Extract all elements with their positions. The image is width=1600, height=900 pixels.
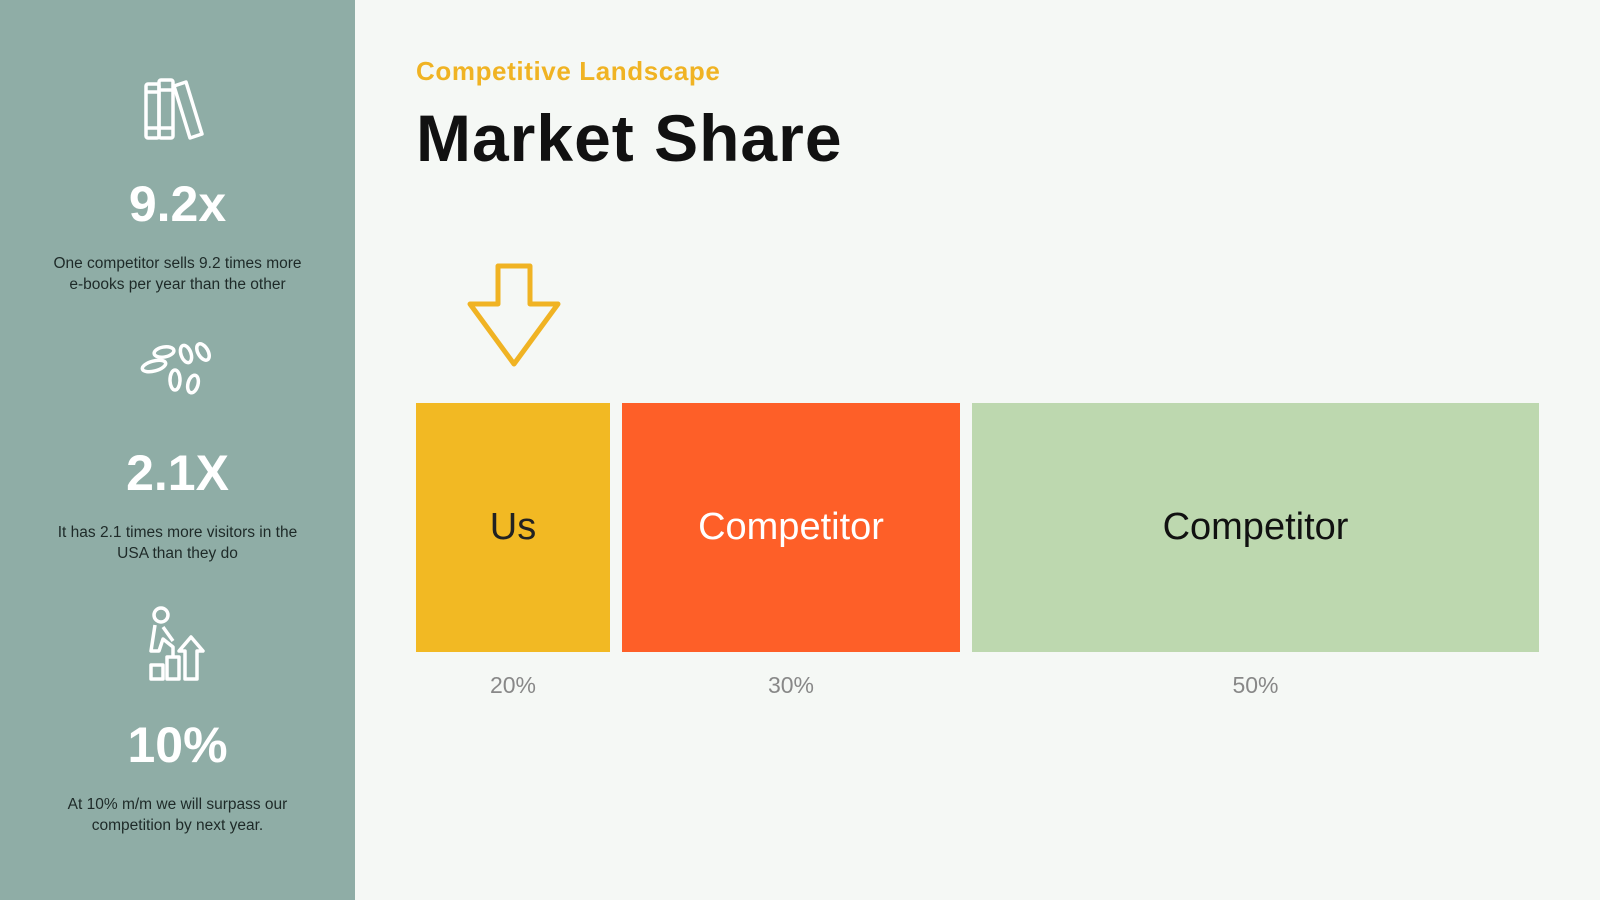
bar: competitor 2 — [972, 403, 1539, 652]
label 50%: 50% — [1232, 672, 1279, 698]
subtitle: Competitive Landscape — [416, 56, 720, 86]
text 2: It has 2.1 times more visitors in the — [58, 524, 297, 541]
bar: competitor 1: Competitor — [698, 506, 884, 548]
stat 2: 2.1X — [126, 445, 229, 501]
text 1: One competitor sells 9.2 times more — [53, 255, 302, 272]
stat 3: 10% — [127, 717, 228, 773]
text 1 — [53, 255, 302, 293]
text 3: competition by next year. — [92, 817, 263, 834]
label 20%: 20% — [490, 672, 536, 698]
icon: footprints — [140, 342, 211, 394]
bar: competitor 1 — [622, 403, 960, 652]
bar: competitor 2: Competitor — [1163, 506, 1348, 548]
text 2: USA than they do — [117, 545, 238, 562]
panel: sidebar — [0, 0, 355, 900]
text 3 — [68, 796, 288, 834]
label 30%: 30% — [768, 672, 814, 698]
icon: books — [144, 78, 204, 140]
stat 1: 9.2x — [129, 176, 226, 232]
bar: us — [416, 403, 610, 652]
title: Market Share — [416, 101, 843, 175]
icon: climbing growth — [149, 606, 205, 681]
text 3: At 10% m/m we will surpass our — [68, 796, 287, 813]
arrow: down — [468, 264, 560, 366]
bar: us: Us — [490, 506, 536, 548]
text 1: e-books per year than the other — [69, 276, 286, 293]
text 2 — [58, 524, 297, 562]
